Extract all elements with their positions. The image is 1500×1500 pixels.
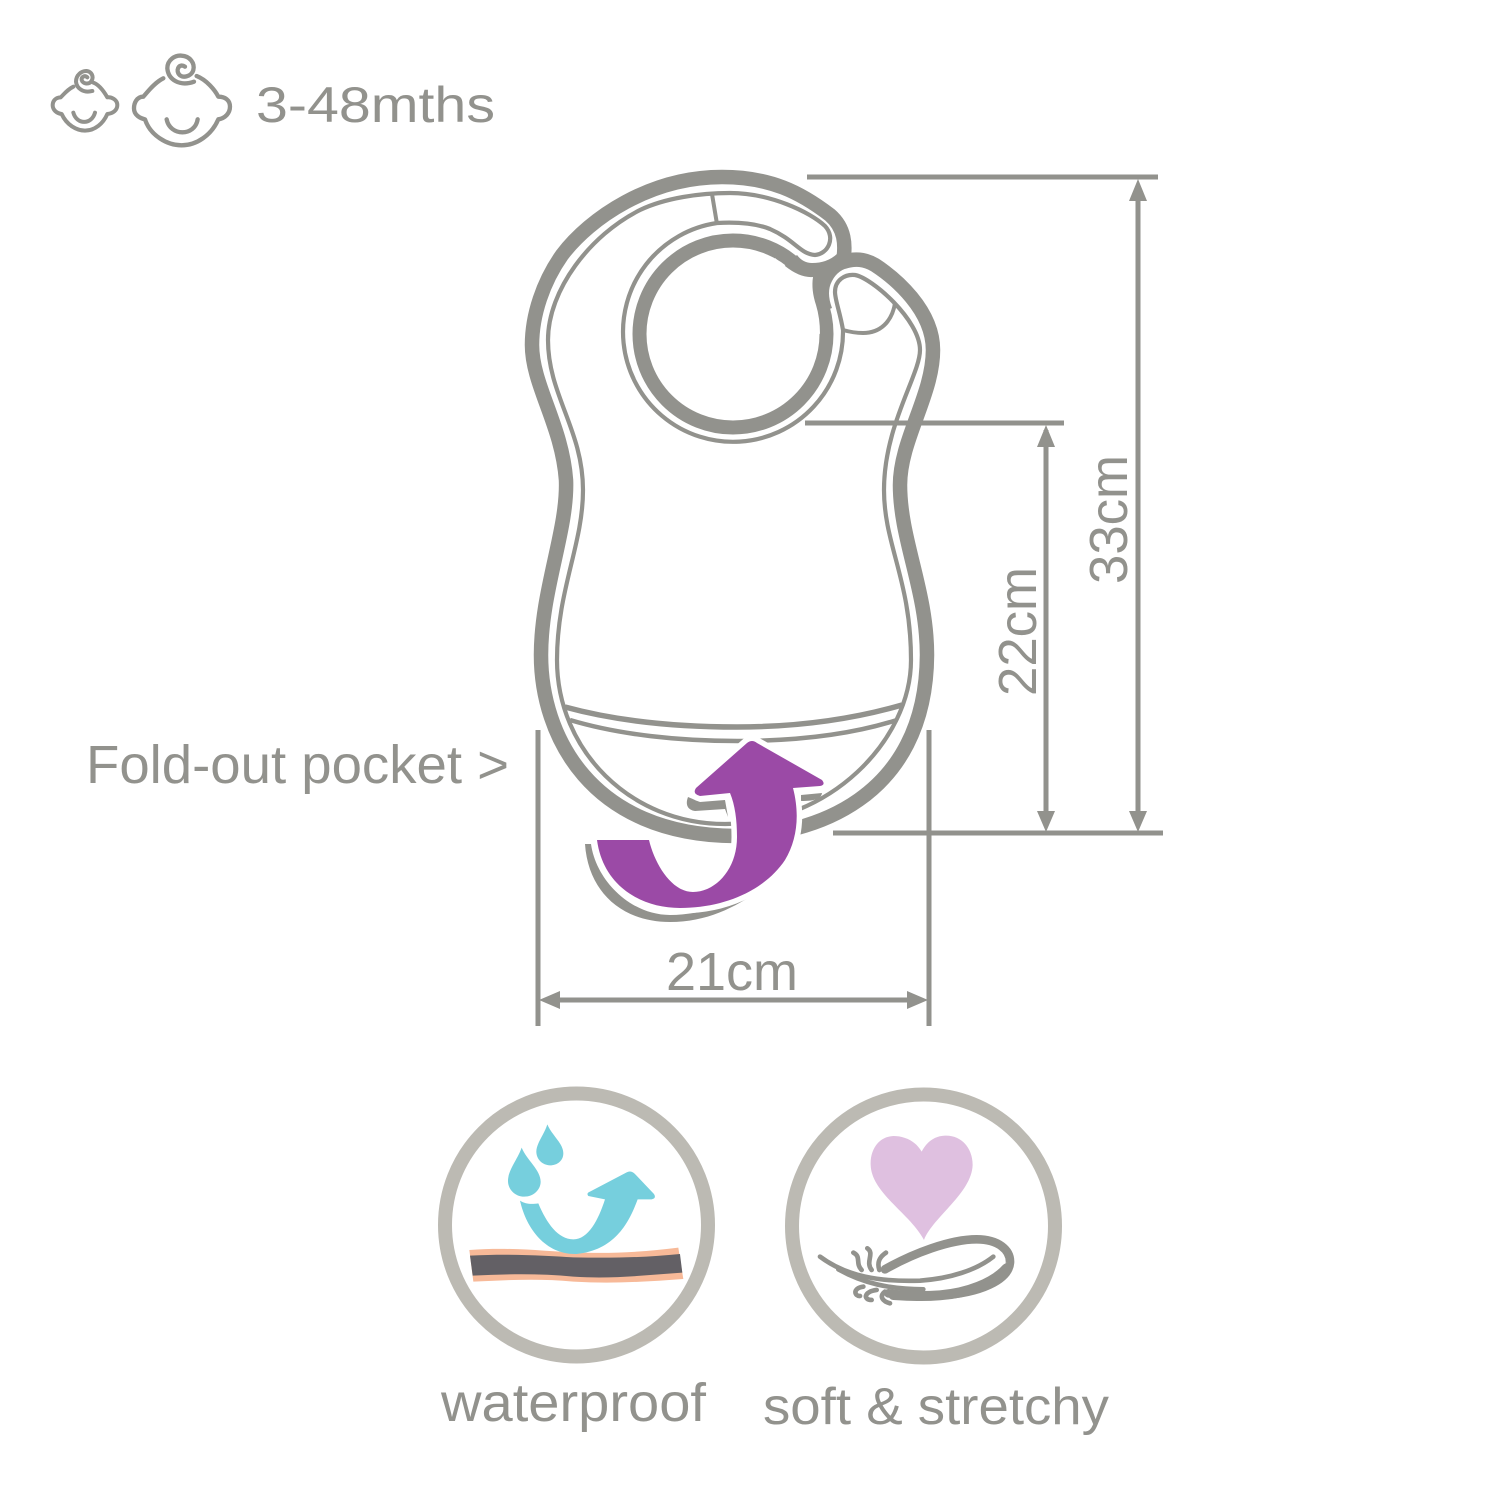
bib outline xyxy=(532,177,933,836)
icon: small baby face xyxy=(53,71,117,131)
height 33cm extension lines xyxy=(807,177,1163,833)
label: 21cm: 21cm xyxy=(666,942,798,1002)
drop xyxy=(508,1148,541,1197)
arrow shadow at right barb xyxy=(801,793,822,801)
icon: large baby face xyxy=(134,56,230,145)
popper tab xyxy=(843,303,895,333)
arrow shadow at left barb xyxy=(687,797,728,817)
label: fold-out pocket: Fold-out pocket > xyxy=(86,735,509,795)
arrow: 33cm dimension xyxy=(1129,179,1147,832)
panel: waterproof xyxy=(445,1094,708,1356)
pocket fold lower line xyxy=(570,720,897,741)
pocket fold upper line xyxy=(565,705,902,727)
heart xyxy=(871,1136,973,1240)
age label: 3-48mths xyxy=(256,77,495,133)
dimension lines xyxy=(538,177,1163,1026)
arrow: 21cm dimension xyxy=(539,991,928,1009)
feather xyxy=(820,1239,1010,1303)
label: waterproof: waterproof xyxy=(440,1373,707,1433)
neck opening corner xyxy=(770,258,820,334)
panel: soft and stretchy xyxy=(792,1094,1055,1358)
teal bounce arrow xyxy=(520,1171,655,1254)
height 22cm extension line xyxy=(805,420,1064,426)
label: soft and stretchy: soft & stretchy xyxy=(763,1378,1109,1436)
arrow shadow crescent xyxy=(585,844,770,922)
arrow: 22cm dimension xyxy=(1037,425,1055,832)
fabric core layer xyxy=(470,1254,682,1277)
label: 33cm: 33cm xyxy=(1079,455,1139,584)
strap divider left xyxy=(712,194,717,224)
bib outer thick edge xyxy=(532,177,933,836)
age range indicator xyxy=(53,56,495,145)
width extension lines xyxy=(538,730,929,1026)
purple arrow xyxy=(597,741,824,908)
fabric outer layer xyxy=(469,1248,683,1283)
icon: waterproof layers, drops and arrow xyxy=(469,1124,683,1283)
badge ring xyxy=(792,1094,1055,1358)
label: 22cm: 22cm xyxy=(988,567,1048,696)
badge ring xyxy=(445,1094,708,1356)
icon: heart and feather xyxy=(820,1136,1010,1303)
drop xyxy=(536,1124,563,1165)
neck ring xyxy=(640,240,826,428)
fold-out pocket arrow xyxy=(585,741,824,922)
bib inner thin line xyxy=(548,193,920,824)
notch join xyxy=(780,250,852,312)
